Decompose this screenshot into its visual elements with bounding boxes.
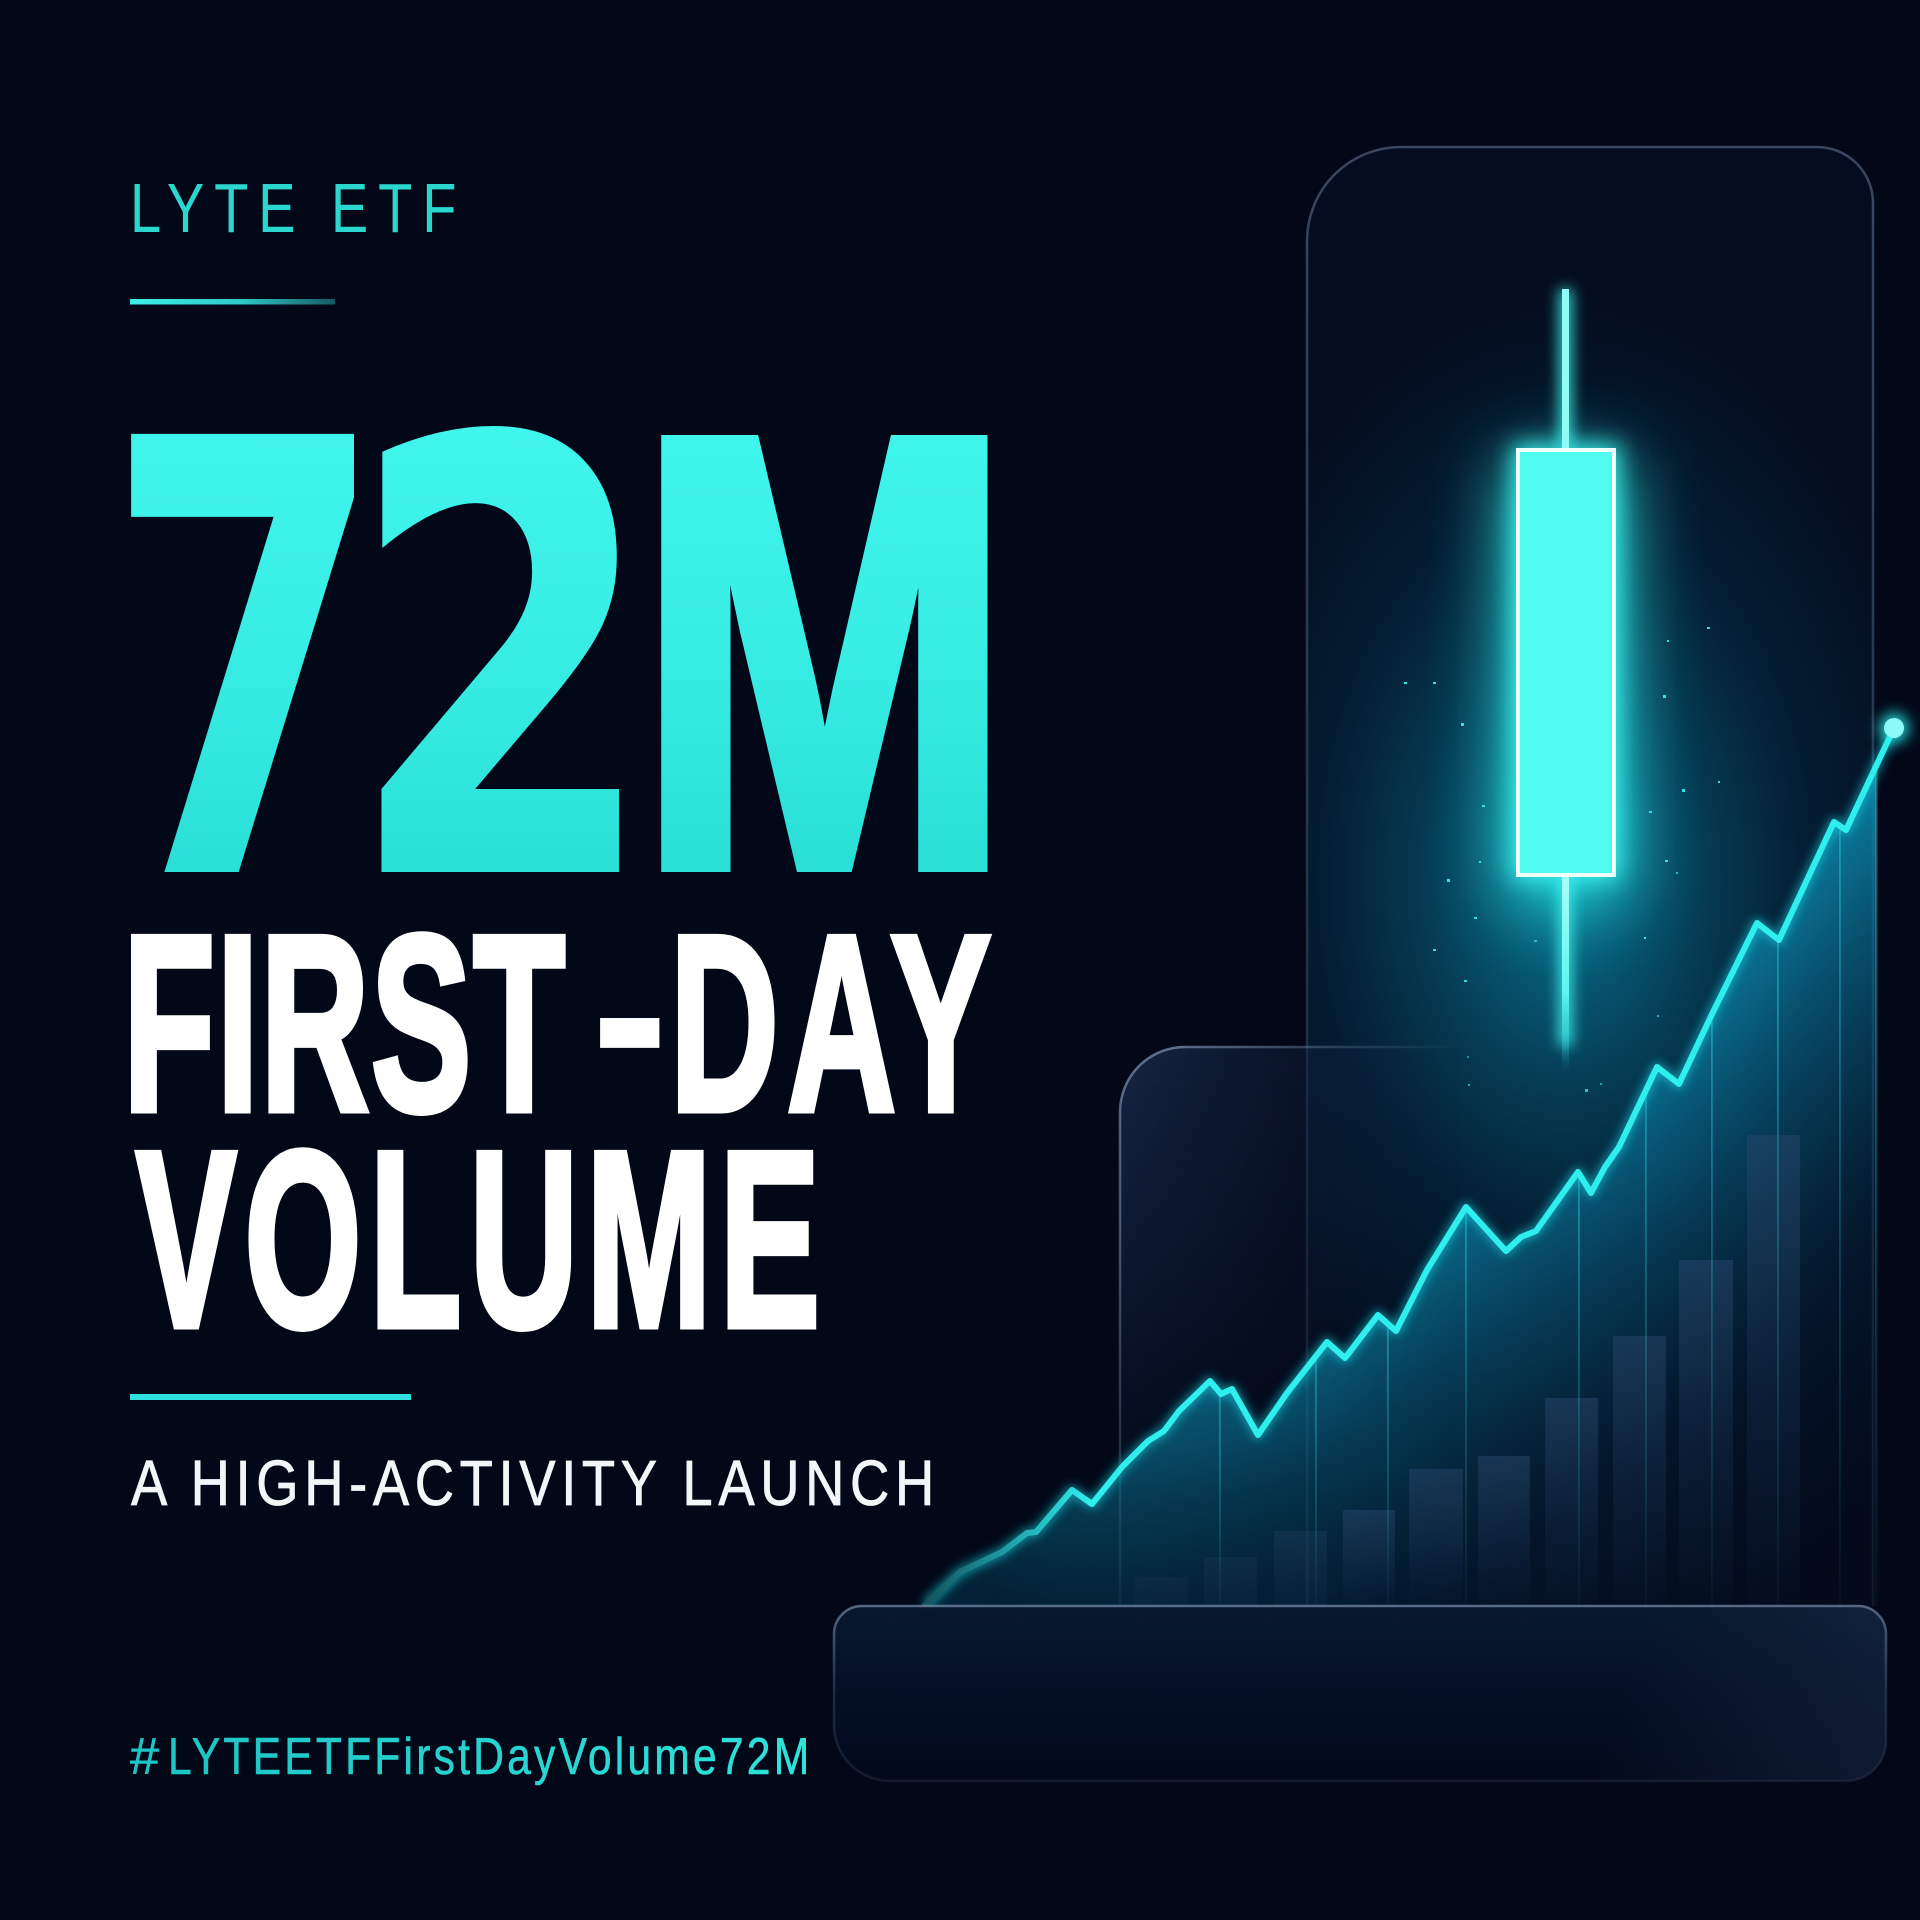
headline number: 72M: 7 [104,314,386,1014]
chart: volume bars [1204,1135,1800,1582]
panel: short glass card [1118,1046,1435,1604]
chart: price line with glowing end point [925,713,1909,1605]
heading: FIRST-DAY: DAY [670,883,991,1163]
heading: VOLUME: VOLUME [136,1099,820,1379]
panel: tall glass card [1307,147,1873,1606]
divider: top accent rule [130,299,335,304]
headline number: 72M: 2 [346,315,658,1015]
particles around candle [1404,627,1720,1092]
heading: FIRST-DAY: FIRST [123,883,565,1163]
panel: base platform [834,1606,1886,1781]
subheading: A HIGH-ACTIVITY LAUNCH [131,1447,934,1519]
chart: vertical guide lines [1219,768,1878,1606]
chart: area under price line [925,765,1876,1606]
headline number: 72M: M [637,310,1012,994]
heading: FIRST-DAY [123,872,991,1163]
candle glow backdrop [1307,385,1872,1330]
icon: glowing candlestick [1506,289,1626,1070]
hashtag: LYTEETFFirstDayVolume72M [168,1728,809,1786]
label: LYTE ETF: LYTE ETF [130,170,456,247]
hashtag: # [130,1728,159,1786]
divider: lower accent rule [130,1394,411,1400]
heading: FIRST-DAY: - [591,872,669,1152]
headline number: 72M [104,310,1012,1015]
